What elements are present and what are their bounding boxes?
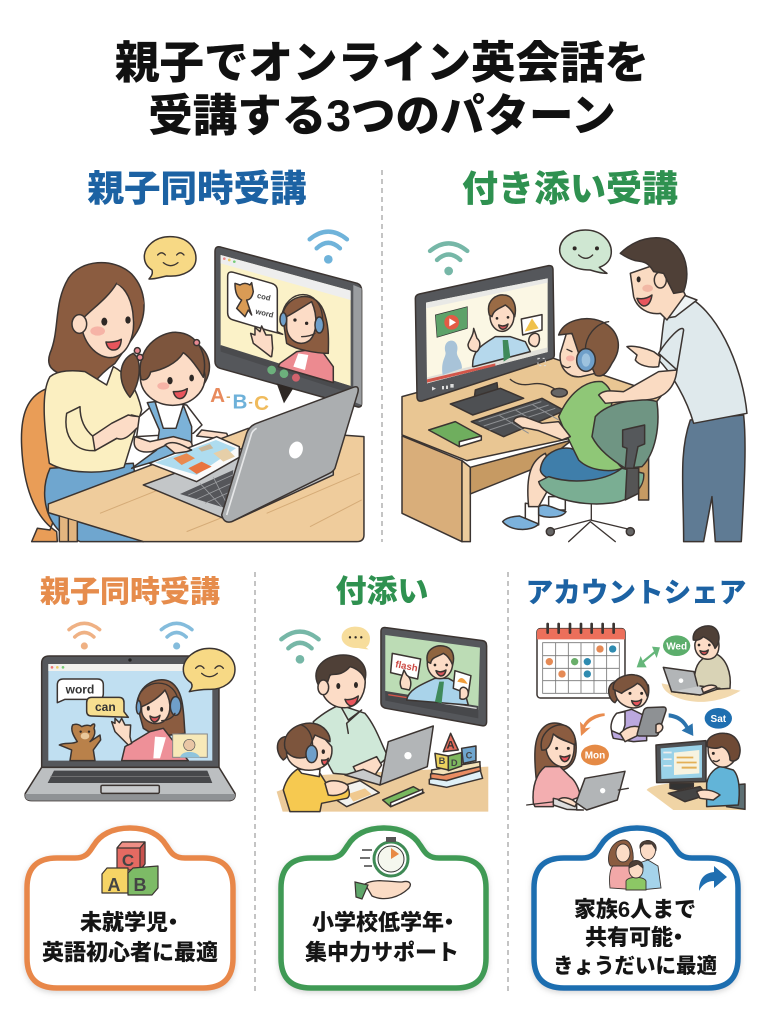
card text: 集中力サポート: [305, 940, 459, 965]
ABC letters: A: [210, 384, 225, 407]
badge: Sat: Sat: [711, 714, 727, 725]
daughter: [121, 332, 231, 468]
person: father: [662, 626, 741, 702]
icon: smile bubble green: [560, 230, 611, 273]
boy: [503, 319, 622, 529]
heading: accompanied lesson: 付き添い受講: [462, 168, 678, 209]
heading: accompaniment (lower): 付添い: [336, 574, 428, 609]
card text: [553, 897, 717, 978]
icon: wifi green: [281, 632, 319, 664]
father: [599, 238, 747, 542]
illustration: father helping son at desktop: [402, 230, 747, 542]
illustrations: lower left and middle: [25, 623, 488, 812]
green book: [429, 422, 481, 447]
ABC letters: -: [248, 394, 253, 409]
card text: 小学校低学年・: [312, 910, 460, 935]
chair wheels and base: [546, 503, 634, 542]
monitor: cod: [256, 291, 272, 303]
bubble: can: can: [95, 700, 116, 714]
father: [313, 655, 388, 775]
keyboard: [471, 398, 565, 437]
laptop screen lid: [222, 387, 358, 522]
card text: 家族6人まで: [574, 897, 696, 922]
table: [277, 767, 488, 812]
card: preschool: [27, 828, 233, 988]
bubble: word: [57, 679, 103, 703]
icon: ABC blocks: [102, 842, 158, 895]
person: girl with tablet: [609, 675, 666, 742]
laptop base: [25, 767, 235, 801]
wall monitor: [381, 627, 487, 726]
desk: [402, 357, 662, 542]
icon: thinking bubble: [342, 627, 370, 649]
picture-in-picture: [173, 734, 207, 757]
badge: Sat: [705, 708, 732, 729]
ABC letters: C: [254, 392, 269, 415]
title: 受講する3つのパターン: [148, 92, 616, 141]
icon: ABC blocks: C: [122, 851, 134, 870]
monitor: word: [254, 307, 275, 320]
flash card: flash: [394, 659, 419, 674]
card text: [42, 910, 218, 965]
laptop scene: [25, 623, 235, 801]
bubble: can: [87, 697, 128, 717]
cable and mouse: [510, 379, 559, 392]
table: [48, 428, 364, 542]
desktop monitor: [415, 266, 554, 415]
card text: 未就学児・: [80, 910, 184, 935]
icon: ABC blocks: B: [134, 875, 146, 895]
ABC letters: -: [226, 389, 231, 404]
letter blocks and books: D: [451, 758, 458, 768]
icon: share arrow: [699, 866, 727, 891]
icon: wifi blue: [310, 232, 347, 264]
card text: 英語初心者に最適: [42, 940, 218, 965]
card: lower elementary: [281, 828, 486, 988]
chair seat and back: [539, 400, 658, 504]
card text: 共有可能・: [585, 925, 689, 950]
icon: wifi green: [430, 243, 467, 275]
badge: Mon: Mon: [585, 751, 605, 762]
icon: stopwatch on hand: [355, 837, 410, 899]
chair: [21, 389, 67, 542]
badge: Mon: [581, 745, 609, 765]
heading: parent and child together: 親子同時受講: [88, 168, 306, 209]
laptop base: [143, 447, 333, 522]
person: boy at desktop: [647, 733, 745, 810]
calendar: [537, 624, 625, 698]
icon: wifi blue small: [161, 623, 192, 650]
bear: [59, 724, 101, 761]
father and child scene: [277, 627, 488, 812]
icon: smile speech bubble: [144, 237, 196, 279]
letter blocks and books: C: [466, 750, 473, 760]
heading: account share: アカウントシェア: [526, 577, 746, 608]
title: 親子でオンライン英会話を: [115, 39, 649, 88]
teacher with headset: [112, 680, 207, 761]
monitor: [215, 247, 362, 407]
laptop frame: [42, 656, 219, 767]
badge: Wed: Wed: [666, 641, 687, 652]
illustration: account sharing: [527, 624, 745, 810]
arrow: blue: [669, 713, 693, 736]
card text: [305, 910, 460, 965]
title: [115, 39, 649, 141]
ABC letters: B: [233, 390, 247, 413]
arrow: green double: [637, 647, 660, 667]
icon: wifi orange: [69, 623, 100, 650]
card text: きょうだいに最適: [553, 955, 717, 978]
illustration: mother and daughter with laptop: [21, 232, 364, 542]
letter blocks and books: B: [439, 756, 446, 766]
letter blocks and books: [429, 733, 483, 787]
icon: family: [608, 840, 661, 890]
badge: Wed: [663, 635, 690, 656]
green book: [383, 787, 424, 807]
arrow: orange: [580, 713, 605, 736]
card: family sharing: [534, 828, 738, 988]
icon: smile bubble: [183, 648, 235, 692]
heading: parent child (lower): 親子同時受講: [40, 576, 220, 609]
tablet: [149, 437, 239, 482]
ABC letters: [210, 384, 269, 415]
laptop: [345, 726, 433, 785]
bubble: word: word: [65, 682, 94, 696]
letter blocks and books: A: [447, 740, 455, 752]
mother: [44, 263, 152, 542]
icon: ABC blocks: A: [108, 875, 120, 895]
person: mother: [527, 723, 628, 810]
child: [277, 723, 349, 812]
tablet: [323, 781, 379, 807]
